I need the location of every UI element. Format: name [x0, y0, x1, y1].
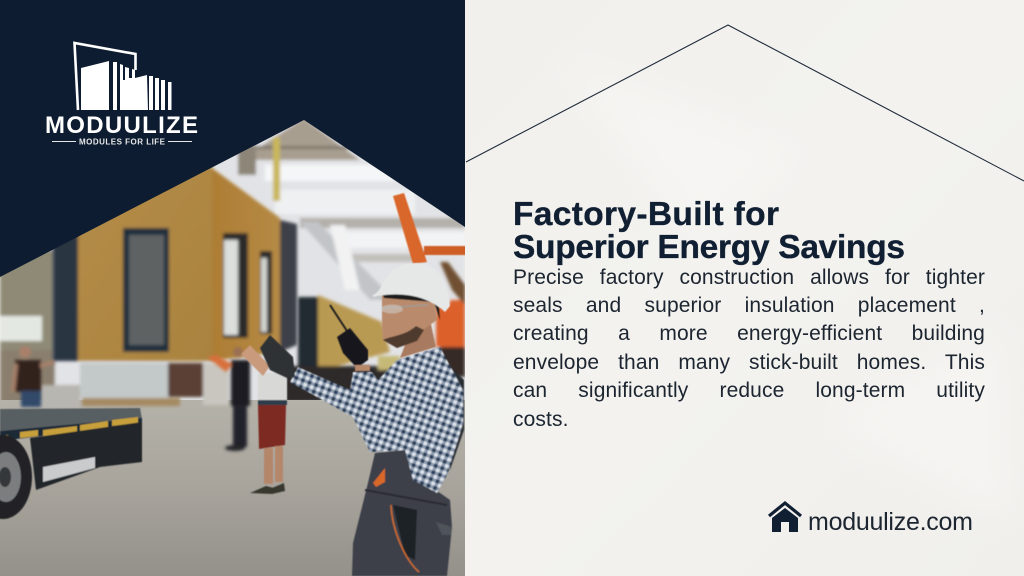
body text: Precise factory construction allows for tighter	[513, 266, 985, 289]
logo wordmark: MODUULIZE	[45, 112, 198, 139]
logo tagline	[52, 138, 192, 146]
crane base and cab	[436, 262, 465, 377]
module house	[40, 165, 297, 409]
logo icon: building	[74, 43, 172, 110]
orange crane	[393, 193, 469, 264]
second module	[285, 295, 400, 402]
background worker: red shorts	[241, 345, 287, 494]
panel: paper background	[465, 0, 1024, 576]
factory background	[0, 118, 465, 410]
truck	[0, 408, 142, 519]
background worker: dark clothes	[207, 347, 250, 451]
background worker: left	[13, 346, 54, 407]
roof outline line	[466, 25, 1024, 181]
body text	[513, 266, 985, 431]
heading: Superior Energy Savings	[513, 229, 905, 266]
overalls	[352, 358, 464, 576]
heading: Factory-Built for	[513, 196, 779, 233]
floor	[0, 400, 465, 576]
logo tagline: MODULES FOR LIFE	[79, 138, 166, 146]
body text: creating a more energy-efficient building	[513, 322, 985, 345]
checked shirt	[290, 347, 463, 493]
body text: costs.	[513, 408, 569, 431]
footer house icon	[769, 503, 801, 532]
body text: can significantly reduce long-term utility	[513, 379, 985, 402]
neck and face	[381, 292, 440, 358]
body text: seals and superior insulation placement ,	[513, 294, 985, 317]
white hard hat	[373, 263, 450, 312]
heading	[513, 196, 905, 266]
body text: envelope than many stick-built homes. This	[513, 351, 985, 374]
footer website: moduulize.com	[808, 508, 973, 536]
foreground worker with walkie-talkie	[260, 263, 464, 576]
logo	[45, 43, 198, 146]
left glove and radio	[330, 305, 370, 371]
panel: navy roof shape	[0, 0, 465, 277]
panel: construction photo	[0, 118, 469, 576]
right glove	[260, 335, 295, 378]
